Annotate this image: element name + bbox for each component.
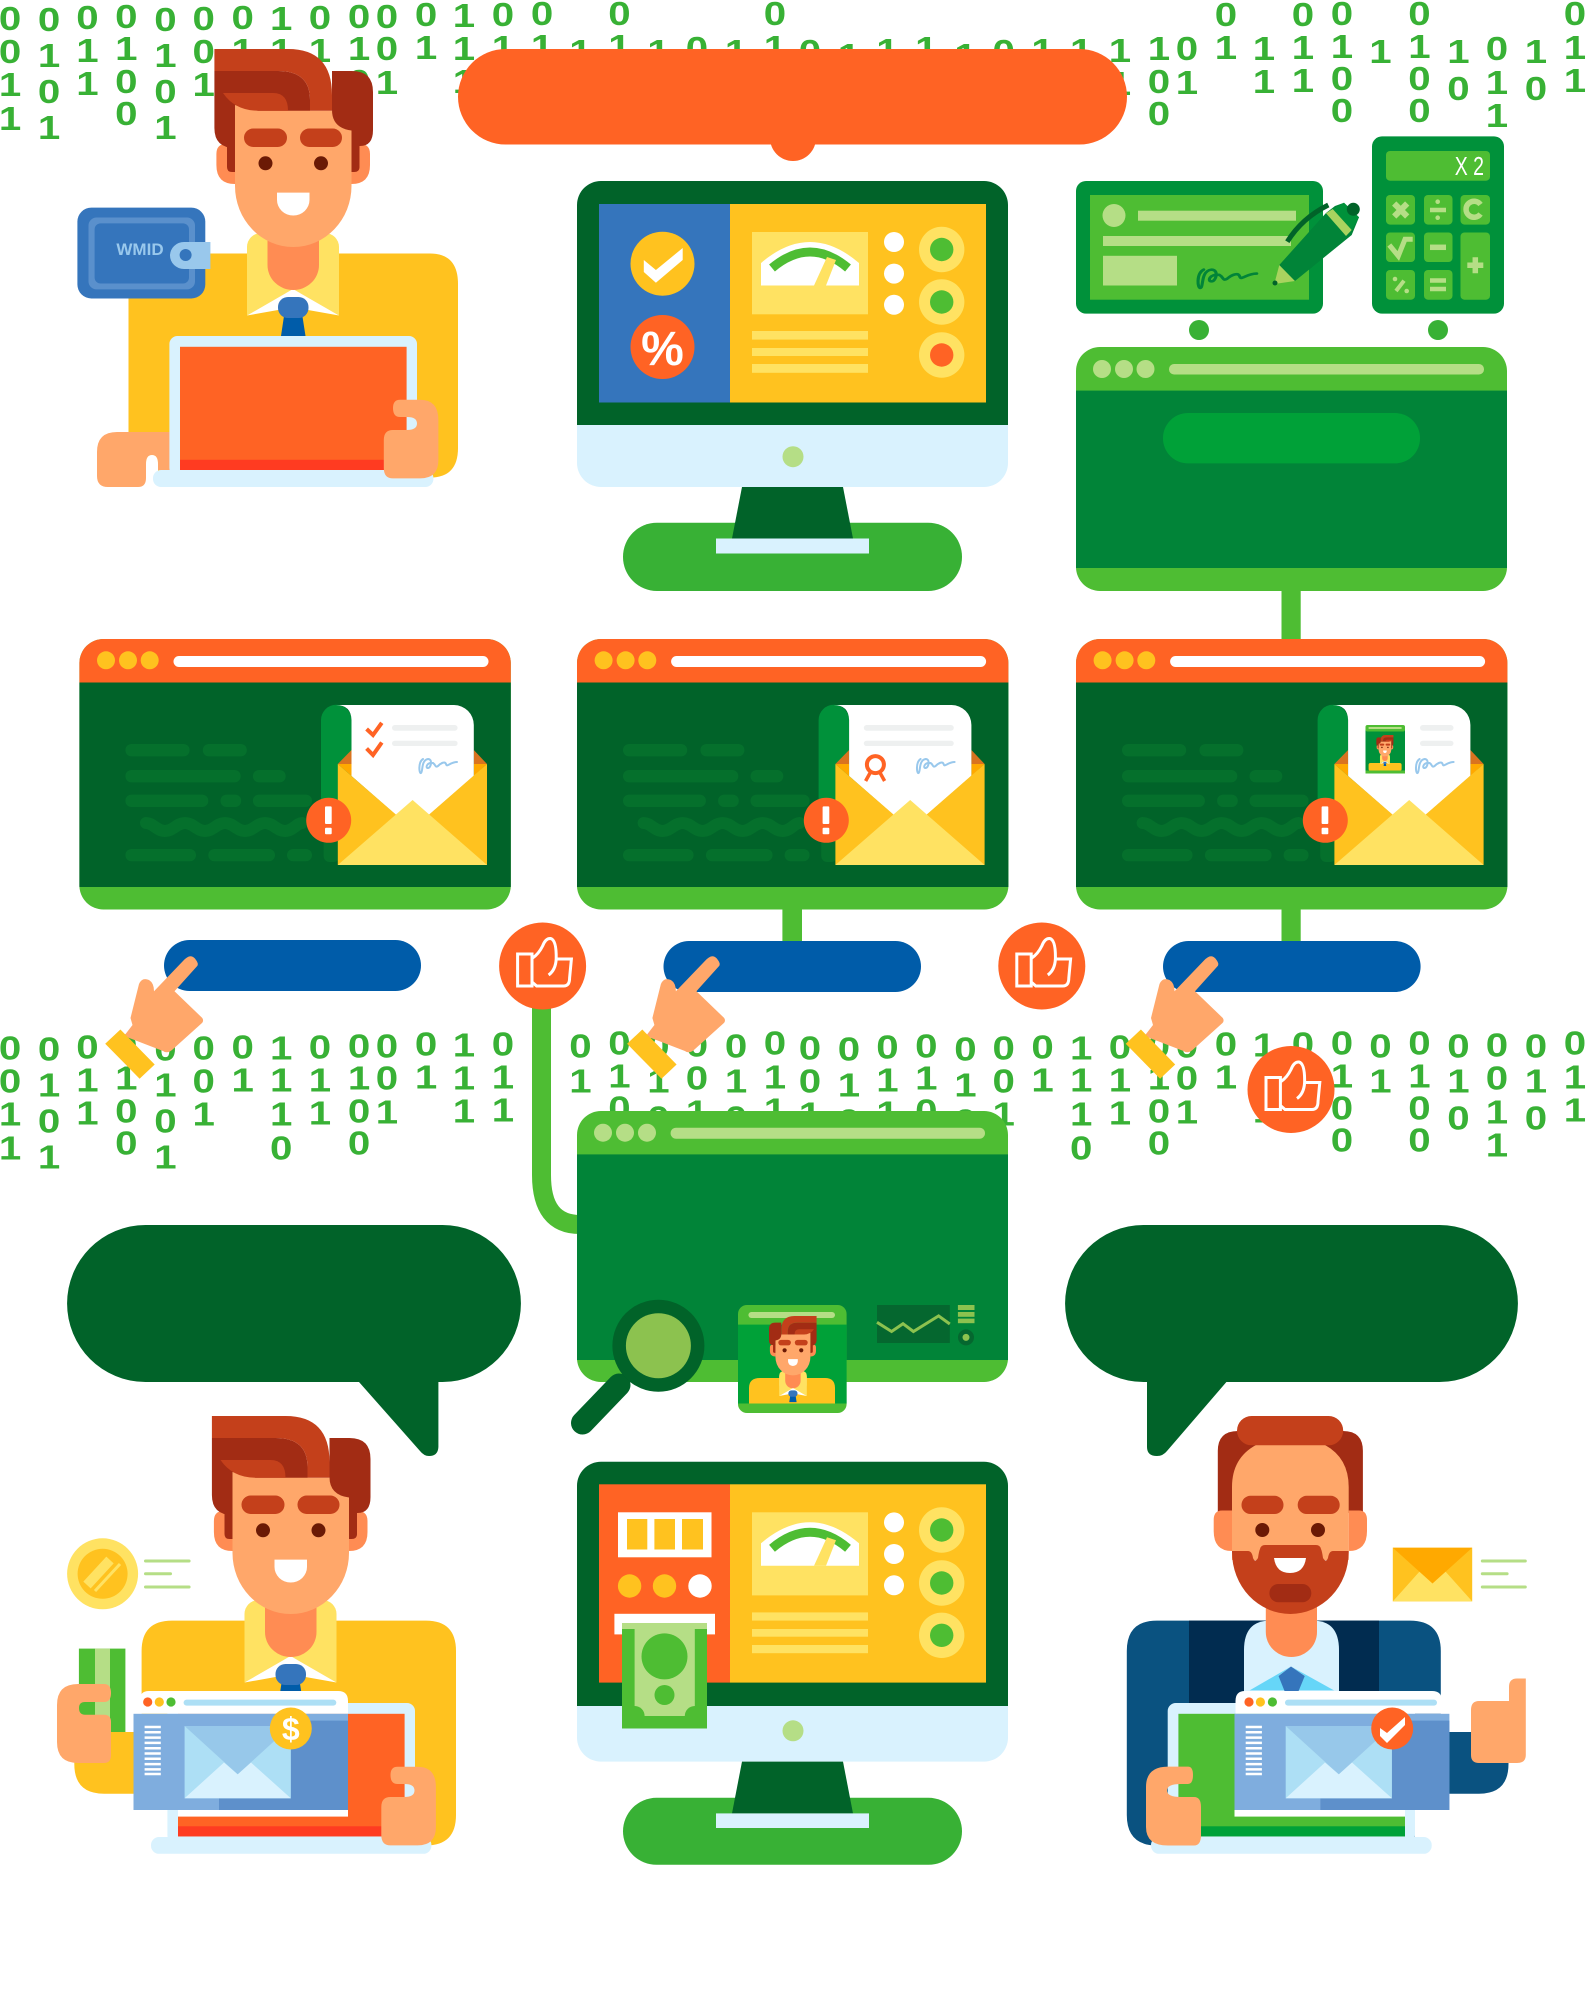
monitor neck bbox=[732, 487, 853, 538]
binary band: middle right: 0100 bbox=[915, 1028, 938, 1162]
monitor chin bbox=[577, 1462, 1008, 1762]
binary band: middle left: 010 bbox=[725, 1028, 747, 1137]
binary band: top right: 01 bbox=[1176, 30, 1198, 101]
binary band: top right: 11 bbox=[1109, 32, 1131, 102]
top monitor dashboard bbox=[577, 181, 1008, 591]
binary band: middle right: 1110 bbox=[1070, 1030, 1092, 1167]
orange side panel bbox=[599, 1484, 730, 1683]
monitor foot bbox=[623, 1798, 962, 1865]
alert badge bbox=[306, 798, 351, 843]
calculator bbox=[1372, 136, 1504, 314]
dim text lines bbox=[125, 744, 340, 862]
binary band: middle right: 0011 bbox=[1486, 1027, 1508, 1164]
banknote bbox=[622, 1623, 707, 1728]
chin patch bbox=[1269, 1584, 1311, 1602]
connector lines bbox=[782, 585, 1301, 945]
binary band: top right: 100 bbox=[1148, 30, 1170, 132]
binary band: top right: 11 bbox=[1070, 32, 1092, 103]
right hand bbox=[384, 400, 438, 478]
panel: top right browser window bbox=[1076, 347, 1507, 591]
collar and tie bbox=[1250, 1666, 1334, 1691]
thumbs up icon 1 bbox=[499, 922, 586, 1010]
binary band: middle right: 011 bbox=[876, 1029, 899, 1132]
binary band: middle left: 011 bbox=[492, 1026, 514, 1129]
binary band: middle right: 01 bbox=[1369, 1028, 1392, 1100]
connector dots bbox=[1189, 320, 1448, 340]
binary band: middle right: 010 bbox=[1447, 1028, 1470, 1137]
binary band: top left: 111 bbox=[453, 0, 475, 100]
coin icon bbox=[67, 1538, 138, 1609]
check badge bbox=[1371, 1708, 1413, 1750]
laptop bbox=[1151, 1703, 1432, 1854]
binary band: top left: 1 bbox=[569, 33, 592, 70]
mouth bbox=[1274, 1558, 1306, 1573]
binary band: top right: 101 bbox=[838, 37, 860, 146]
binary band: top left: 0101 bbox=[154, 1, 177, 146]
bottom monitor with cash slot bbox=[577, 1462, 1008, 1865]
head bbox=[212, 1416, 370, 1703]
binary band: top left: 1 bbox=[725, 33, 747, 70]
binary band: middle right bbox=[799, 1025, 1586, 1176]
man with wallet and laptop bbox=[77, 49, 458, 487]
monitor foot bbox=[623, 523, 962, 591]
blue button 2 bbox=[664, 941, 921, 992]
binary band: middle left: 011 bbox=[76, 1029, 99, 1132]
binary band: top left: 011 bbox=[309, 0, 331, 102]
man body bbox=[128, 254, 458, 478]
hair bbox=[1218, 1431, 1363, 1513]
panel: email window 1 bbox=[79, 639, 511, 910]
binary band: middle left: 011 bbox=[764, 1025, 786, 1129]
yellow screen with gauge bbox=[730, 1484, 986, 1683]
pointing hand 3 bbox=[1126, 956, 1224, 1079]
bank card bbox=[79, 1649, 125, 1732]
wallet icon: WMID bbox=[116, 240, 164, 259]
binary band: top right: 10 bbox=[1525, 33, 1547, 107]
binary band: top right: 011 bbox=[799, 33, 821, 137]
neck bbox=[1266, 1605, 1317, 1657]
shirt bbox=[1244, 1621, 1339, 1692]
binary band: top left bbox=[0, 0, 786, 146]
binary band: top right: 1 bbox=[1031, 32, 1054, 69]
face bbox=[1232, 1445, 1349, 1560]
dollar badge: $ bbox=[282, 1711, 300, 1747]
id photo bbox=[1366, 725, 1405, 774]
binary band: top right: 011 bbox=[1486, 30, 1508, 134]
power dot bbox=[782, 446, 804, 467]
monitor bezel bbox=[577, 181, 1008, 425]
motion lines bbox=[144, 1560, 191, 1588]
monitor bar bbox=[716, 1813, 869, 1828]
thumbs up icon 2 bbox=[998, 922, 1085, 1010]
binary band: middle right: 01 bbox=[1031, 1029, 1054, 1099]
body bbox=[74, 1621, 456, 1846]
dollar badge bbox=[270, 1708, 312, 1750]
alert badge bbox=[804, 798, 849, 843]
thumbs up icon 3 bbox=[1248, 1046, 1334, 1133]
binary digit background: top and middle bands bbox=[0, 0, 1586, 1176]
binary band: middle left: 001 bbox=[376, 1028, 398, 1131]
binary band: top right: 01 bbox=[993, 33, 1015, 103]
monitor bar bbox=[716, 538, 869, 554]
binary band: middle right: 0011 bbox=[799, 1030, 821, 1167]
jacket bbox=[1127, 1621, 1508, 1846]
binary band: top left: 0101 bbox=[38, 1, 60, 146]
gap between fingers bbox=[146, 455, 158, 487]
panel: email window 3 bbox=[1076, 639, 1507, 910]
binary band: middle left: 0011 bbox=[686, 1027, 708, 1164]
blue side panel: % bbox=[641, 323, 684, 376]
dim text lines bbox=[1122, 744, 1336, 862]
left hand bbox=[1146, 1767, 1201, 1846]
blue button 1 bbox=[164, 940, 421, 991]
jacket inner bbox=[1189, 1621, 1379, 1706]
right hand bbox=[381, 1767, 436, 1845]
pointing hand 1 bbox=[105, 956, 203, 1079]
curved connector to review panel bbox=[542, 1000, 580, 1224]
thumbs up hand bbox=[1471, 1678, 1526, 1763]
binary band: top right: 100 bbox=[915, 30, 938, 132]
envelope with letter bbox=[306, 705, 487, 865]
brows bbox=[1242, 1496, 1340, 1514]
speech bubble right bbox=[1065, 1225, 1518, 1456]
binary band: middle left: 111 bbox=[453, 1027, 475, 1130]
binary band: middle right: 001 bbox=[1176, 1028, 1198, 1131]
binary band: middle right: 011 bbox=[1564, 1025, 1586, 1129]
left hand bbox=[97, 432, 172, 487]
binary band: middle right: 0100 bbox=[1148, 1028, 1170, 1162]
binary band: middle right: 011 bbox=[1109, 1029, 1131, 1132]
panel: email window 2 bbox=[577, 639, 1008, 910]
binary band: top right: 11 bbox=[876, 32, 899, 102]
binary band: middle left: 0100 bbox=[608, 1025, 631, 1159]
binary band: middle left: 010 bbox=[647, 1028, 670, 1137]
binary band: middle right: 001 bbox=[993, 1030, 1015, 1133]
binary band: top right: 10 bbox=[954, 37, 977, 110]
motion lines bbox=[1481, 1560, 1527, 1588]
binary band: top left: 1 bbox=[647, 33, 670, 70]
envelope with id photo bbox=[1303, 705, 1484, 865]
binary band: middle left: 01 bbox=[569, 1028, 592, 1100]
signed cheque card with pen bbox=[1076, 181, 1360, 314]
email window bbox=[1234, 1691, 1449, 1817]
hair top bbox=[1237, 1416, 1343, 1445]
binary band: top left: 111 bbox=[270, 0, 292, 103]
speech bubble left bbox=[67, 1225, 521, 1456]
binary band: middle left: 1110 bbox=[270, 1030, 292, 1167]
eyes bbox=[1255, 1523, 1325, 1537]
wallet icon bbox=[77, 208, 210, 298]
calculator key symbols bbox=[1389, 201, 1483, 291]
calculator: X 2 bbox=[1455, 151, 1484, 181]
binary band: middle right: 0101 bbox=[838, 1031, 860, 1176]
binary band: middle right: 0101 bbox=[954, 1031, 977, 1176]
binary band: top left: 001 bbox=[193, 0, 215, 103]
binary band: middle right: 010 bbox=[1525, 1028, 1547, 1137]
man head bbox=[214, 49, 373, 336]
bearded man with email bbox=[1127, 1416, 1527, 1854]
binary band: middle left bbox=[0, 1025, 786, 1176]
panel: review window bbox=[577, 1111, 1008, 1382]
binary band: middle right: 0100 bbox=[1408, 1025, 1431, 1159]
title bubble bbox=[458, 49, 1127, 161]
binary band: top right: 10 bbox=[1447, 33, 1470, 107]
binary band: top left: 01 bbox=[231, 0, 254, 69]
laptop bbox=[151, 1703, 431, 1854]
binary band: middle left: 0101 bbox=[38, 1031, 60, 1176]
yellow screen with gauge bbox=[730, 204, 986, 402]
binary band: top left: 011 bbox=[76, 0, 99, 102]
binary band: middle left: 001 bbox=[193, 1030, 215, 1133]
binary band: top right: 1 bbox=[1369, 33, 1392, 70]
profile card bbox=[738, 1305, 847, 1413]
email window bbox=[134, 1691, 348, 1817]
beard bbox=[1232, 1545, 1349, 1614]
binary band: middle left: 01 bbox=[415, 1026, 437, 1096]
binary band: top left: 0100 bbox=[115, 0, 138, 132]
binary band: middle left: 0100 bbox=[115, 1028, 138, 1162]
binary band: top left: 0100 bbox=[348, 0, 370, 132]
ears bbox=[1214, 1510, 1367, 1551]
binary band: middle left: 0101 bbox=[154, 1031, 177, 1176]
blue side panel bbox=[599, 204, 730, 402]
binary band: top right bbox=[799, 0, 1586, 146]
binary band: middle left: 0100 bbox=[348, 1028, 370, 1162]
magnifier bbox=[582, 1300, 704, 1423]
binary band: top right: 11 bbox=[1253, 30, 1275, 100]
alert badge bbox=[1303, 798, 1348, 843]
binary band: top left: 0 bbox=[686, 30, 708, 67]
checklist bbox=[367, 723, 382, 755]
dim text lines bbox=[623, 744, 837, 862]
laptop bbox=[153, 336, 433, 487]
binary band: middle right: 111 bbox=[1253, 1027, 1275, 1130]
man with coin and card bbox=[57, 1416, 456, 1854]
binary band: middle right: 011 bbox=[1292, 1026, 1314, 1129]
binary band: middle right: 01 bbox=[1215, 1026, 1237, 1096]
binary band: middle left: 011 bbox=[309, 1029, 331, 1132]
blue button 3 bbox=[1163, 941, 1421, 992]
binary band: middle left: 01 bbox=[231, 1029, 254, 1099]
power dot bbox=[782, 1720, 804, 1741]
certificate seal bbox=[866, 756, 885, 781]
left hand bbox=[57, 1684, 111, 1763]
pen bbox=[1272, 203, 1360, 286]
binary band: middle right: 0100 bbox=[1331, 1025, 1353, 1159]
binary band: top left: 001 bbox=[376, 0, 398, 101]
envelope with certificate bbox=[804, 705, 985, 865]
small chart bbox=[877, 1305, 974, 1345]
monitor chin bbox=[577, 181, 1008, 487]
monitor neck bbox=[732, 1762, 853, 1813]
monitor bezel bbox=[577, 1462, 1008, 1706]
envelope icon bbox=[1393, 1548, 1472, 1601]
pointing hand 2 bbox=[627, 956, 725, 1079]
